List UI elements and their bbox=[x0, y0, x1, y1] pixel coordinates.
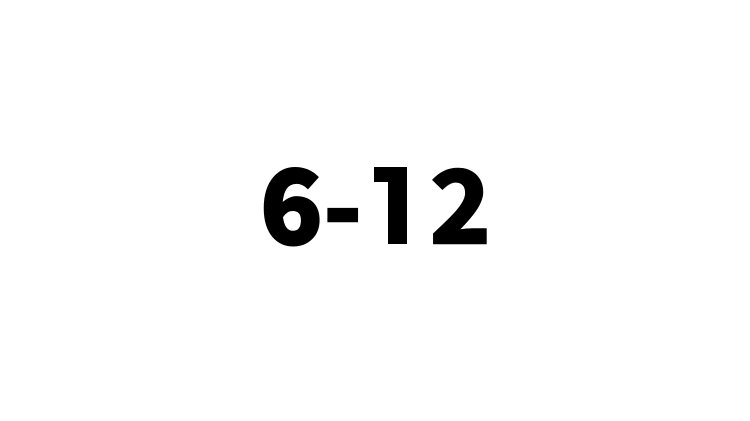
title: 6-12: 1 bbox=[364, 125, 427, 274]
title: 6-12: - bbox=[323, 126, 362, 275]
title: 6-12 bbox=[260, 125, 492, 275]
title: 6-12: 6 bbox=[260, 125, 323, 274]
title: 6-12: 2 bbox=[429, 125, 492, 274]
